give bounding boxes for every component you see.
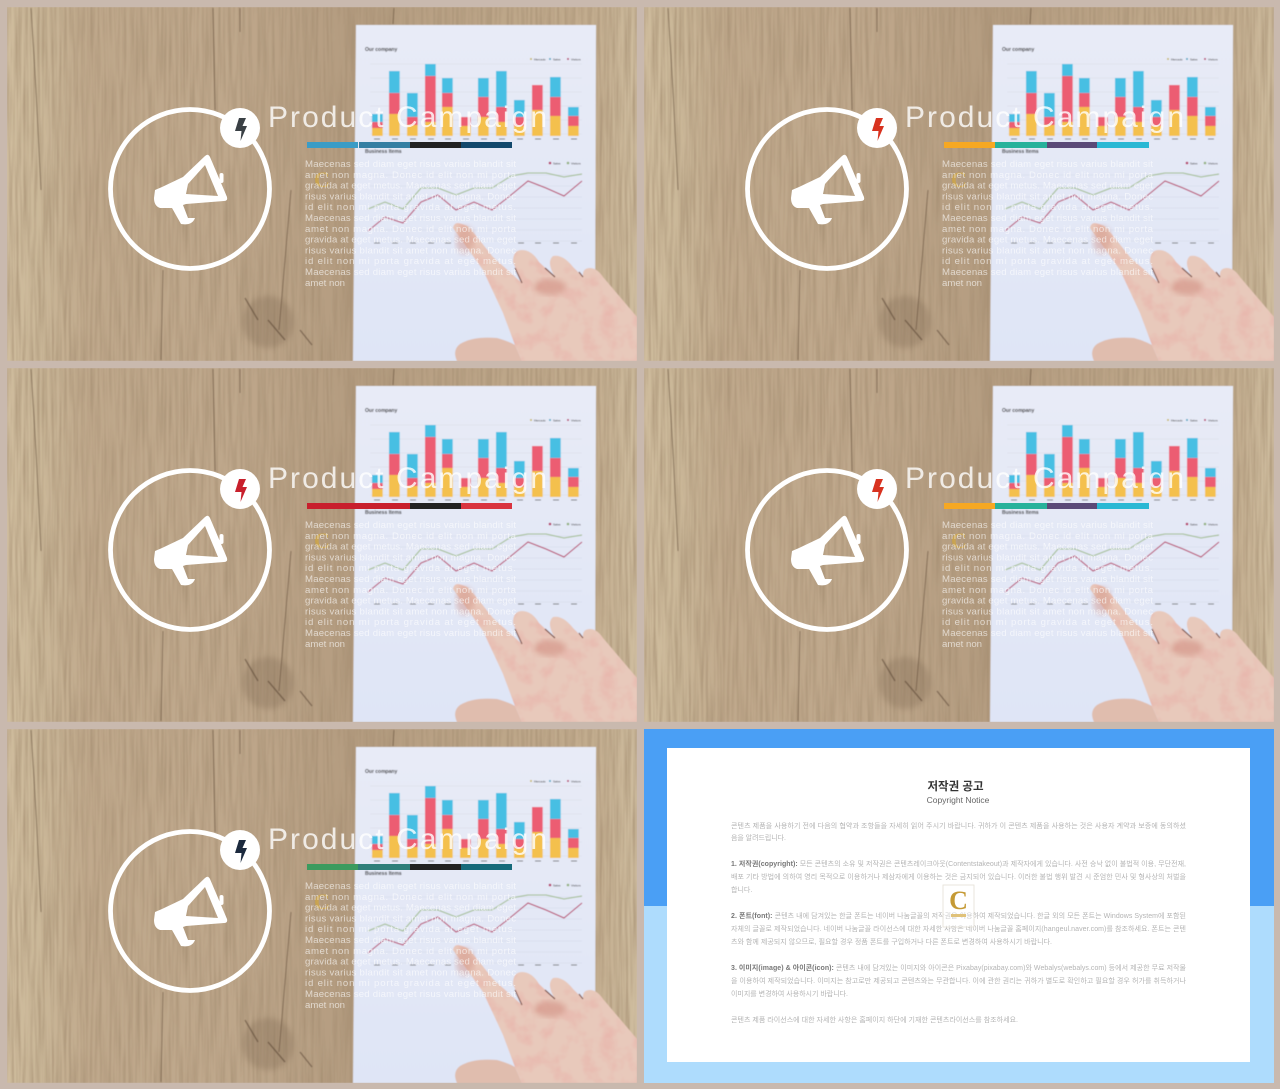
text block	[305, 520, 517, 650]
text block: gravida at eget metus. Maecenas sed diam eget	[942, 235, 1153, 246]
text block: Maecenas sed diam eget risus varius blandit sit	[305, 267, 516, 278]
text block: amet non magna. Donec id elit non mi porta	[305, 531, 517, 542]
panel: slide 4 orange	[644, 368, 1277, 722]
text block: gravida at eget metus. Maecenas sed diam eget	[942, 181, 1153, 192]
text block: amet non magna. Donec id elit non mi porta	[942, 170, 1154, 181]
text block: Maecenas sed diam eget risus varius blandit sit	[942, 574, 1153, 585]
color bar	[307, 503, 512, 509]
text block: amet non magna. Donec id elit non mi porta	[942, 224, 1154, 235]
text block: notice body: 츠와 함께 제공되지 않으므로, 필요할 경우 정품 폰트를 구입하거나 다른 폰트로 변경하여 사용하시기 바랍니다.	[731, 937, 1052, 946]
text block: notice body: 배포 기타 방법에 의하여 영리 목적으로 이용하거나 제삼자에게 이용하는 것은 금지되어 있습니다. 이러한 불법 행위 발견 시 준엄한 민사 및 형사상의 처벌을	[731, 872, 1187, 881]
watermark: gold C: C	[314, 528, 330, 553]
watermark: gold C: C	[314, 167, 330, 192]
panel: slide 1 blue	[7, 7, 640, 361]
text block: Maecenas sed diam eget risus varius blandit sit	[305, 935, 516, 946]
text block: amet non magna. Donec id elit non mi porta	[305, 892, 517, 903]
title: Product Campaign	[268, 101, 547, 134]
text block: id elit non mi porta gravida at eget metus.	[305, 563, 516, 574]
text block: amet non magna. Donec id elit non mi porta	[305, 224, 517, 235]
icon: megaphone in circle with red bolt badge	[748, 469, 906, 630]
text block: id elit non mi porta gravida at eget metus.	[305, 202, 516, 213]
watermark: large gold C: C	[949, 886, 968, 915]
text block: risus varius blandit sit amet non magna. Donec	[942, 245, 1153, 256]
text block	[305, 159, 517, 289]
text block: amet non	[305, 278, 345, 289]
text block: Maecenas sed diam eget risus varius blandit sit	[942, 159, 1153, 170]
title: Product Campaign	[268, 823, 547, 856]
text block: id elit non mi porta gravida at eget metus.	[942, 202, 1153, 213]
text block: id elit non mi porta gravida at eget metus.	[942, 563, 1153, 574]
text block: id elit non mi porta gravida at eget metus.	[305, 924, 516, 935]
watermark: gold C: C	[314, 889, 330, 914]
text block: notice body: 이미지를 변경하여 사용하시기 바랍니다.	[731, 989, 848, 998]
text block: notice body: 음을 알려드립니다.	[731, 833, 786, 842]
text block: amet non magna. Donec id elit non mi porta	[942, 531, 1154, 542]
text block: id elit non mi porta gravida at eget metus.	[942, 256, 1153, 267]
text block: Maecenas sed diam eget risus varius blandit sit	[942, 520, 1153, 531]
text block: Maecenas sed diam eget risus varius blandit sit	[305, 159, 516, 170]
text block: id elit non mi porta gravida at eget metus.	[942, 617, 1153, 628]
panel: copyright notice	[644, 729, 1274, 1083]
text block: gravida at eget metus. Maecenas sed diam eget	[305, 235, 516, 246]
text block: gravida at eget metus. Maecenas sed diam eget	[942, 596, 1153, 607]
color bar	[944, 503, 1149, 509]
text block: risus varius blandit sit amet non magna. Donec	[305, 245, 516, 256]
text block	[942, 520, 1154, 650]
text block: id elit non mi porta gravida at eget metus.	[305, 978, 516, 989]
panel: slide 5 green	[7, 729, 640, 1083]
text block: notice body: 을 이용하여 제작되었습니다. 이미지는 참고로만 제공되고 콘텐츠와는 무관합니다. 이에 관한 권리는 귀하가 별도로 확인하고 필요할 경우 허가를 취득하거나	[731, 976, 1187, 985]
text block	[305, 881, 517, 1011]
text block: notice body: 3. 이미지(image) & 아이콘(icon): 콘텐츠 내에 담겨있는 이미지와 아이콘은 Pixabay(pixabay.com)와 Webalys(webalys.com) 등에서 제공한 무료 저작물	[731, 963, 1187, 972]
watermark: gold C: C	[951, 167, 967, 192]
heading: copyright notice: 저작권 공고	[927, 779, 984, 793]
text block: Maecenas sed diam eget risus varius blandit sit	[942, 213, 1153, 224]
text block: amet non magna. Donec id elit non mi porta	[942, 585, 1154, 596]
title: Product Campaign	[268, 462, 547, 495]
text block: amet non	[942, 639, 982, 650]
heading: copyright notice	[927, 779, 990, 805]
text block: risus varius blandit sit amet non magna. Donec	[942, 552, 1153, 563]
icon: megaphone in circle with crimson bolt badge	[110, 469, 270, 630]
text block: risus varius blandit sit amet non magna. Donec	[942, 191, 1153, 202]
icon: megaphone in circle with red bolt badge	[748, 108, 906, 268]
text block: gravida at eget metus. Maecenas sed diam eget	[305, 181, 516, 192]
text block: gravida at eget metus. Maecenas sed diam eget	[305, 542, 516, 553]
text block: notice body: 자체의 글꼴로 제작되었습니다. 네이버 나눔글꼴 라이선스에 대한 자세한 사항은 네이버 나눔글꼴 홈페이지(hangeul.naver.com)를 참조하세요. 폰트는 콘텐	[731, 924, 1186, 933]
text block: amet non	[305, 639, 345, 650]
heading: copyright notice: Copyright Notice	[927, 795, 990, 805]
color bar	[307, 142, 512, 148]
text block: amet non	[305, 1000, 345, 1011]
watermark: large gold C	[943, 885, 974, 927]
text block: gravida at eget metus. Maecenas sed diam eget	[305, 957, 516, 968]
panel: slide 3 red	[7, 368, 640, 722]
text block: Maecenas sed diam eget risus varius blandit sit	[305, 574, 516, 585]
text block: notice body: 합니다.	[731, 885, 752, 894]
text block: Maecenas sed diam eget risus varius blandit sit	[305, 520, 516, 531]
text block: risus varius blandit sit amet non magna. Donec	[942, 606, 1153, 617]
text block: risus varius blandit sit amet non magna. Donec	[305, 913, 516, 924]
text block: Maecenas sed diam eget risus varius blandit sit	[305, 628, 516, 639]
watermark: gold C: C	[951, 528, 967, 553]
color bar	[944, 142, 1149, 148]
text block: risus varius blandit sit amet non magna. Donec	[305, 606, 516, 617]
text block: risus varius blandit sit amet non magna. Donec	[305, 191, 516, 202]
text block: notice body: 1. 저작권(copyright): 모든 콘텐츠의 소유 및 저작권은 콘텐츠레이크아웃(Contentstakeout)과 제작자에게 있습니다. 사전 승낙 없이 불법적 이용, 무단전재,	[731, 859, 1186, 868]
text block: Maecenas sed diam eget risus varius blandit sit	[942, 628, 1153, 639]
text block: notice body: 2. 폰트(font): 콘텐츠 내에 담겨있는 한글 폰트는 네이버 나눔글꼴의 저작권을 이용하여 제작되었습니다. 한글 외의 모든 폰트는 Windows System에 포함된	[731, 911, 1186, 920]
title: Product Campaign	[905, 101, 1184, 134]
text block: risus varius blandit sit amet non magna. Donec	[305, 552, 516, 563]
icon: megaphone in circle with dark bolt badge	[110, 108, 270, 268]
text block: Maecenas sed diam eget risus varius blandit sit	[305, 881, 516, 892]
text block: Maecenas sed diam eget risus varius blandit sit	[305, 989, 516, 1000]
text block: amet non	[942, 278, 982, 289]
text block: notice body: 콘텐츠 제품을 사용하기 전에 다음의 협약과 조항들을 자세히 읽어 주시기 바랍니다. 귀하가 이 콘텐츠 제품을 사용하는 것은 사용자 계약과 보증에 동의하셨	[731, 821, 1187, 830]
text block: id elit non mi porta gravida at eget metus.	[305, 256, 516, 267]
color bar	[307, 864, 512, 870]
text block: gravida at eget metus. Maecenas sed diam eget	[942, 542, 1153, 553]
text block: amet non magna. Donec id elit non mi porta	[305, 946, 517, 957]
text block: Maecenas sed diam eget risus varius blandit sit	[305, 213, 516, 224]
text block	[942, 159, 1154, 289]
text block: notice body	[731, 821, 1187, 1024]
text block: risus varius blandit sit amet non magna. Donec	[305, 967, 516, 978]
text block: gravida at eget metus. Maecenas sed diam eget	[305, 903, 516, 914]
text block: id elit non mi porta gravida at eget metus.	[305, 617, 516, 628]
text block: notice body: 콘텐츠 제품 라이선스에 대한 자세한 사항은 홈페이지 하단에 기재한 콘텐츠라이선스를 참조하세요.	[731, 1015, 1018, 1024]
icon: megaphone in circle with navy bolt badge	[110, 830, 270, 990]
title: Product Campaign	[905, 462, 1184, 495]
text block: Maecenas sed diam eget risus varius blandit sit	[942, 267, 1153, 278]
text block: gravida at eget metus. Maecenas sed diam eget	[305, 596, 516, 607]
panel: slide 2 orange	[644, 7, 1277, 361]
text block: amet non magna. Donec id elit non mi porta	[305, 585, 517, 596]
text block: amet non magna. Donec id elit non mi porta	[305, 170, 517, 181]
